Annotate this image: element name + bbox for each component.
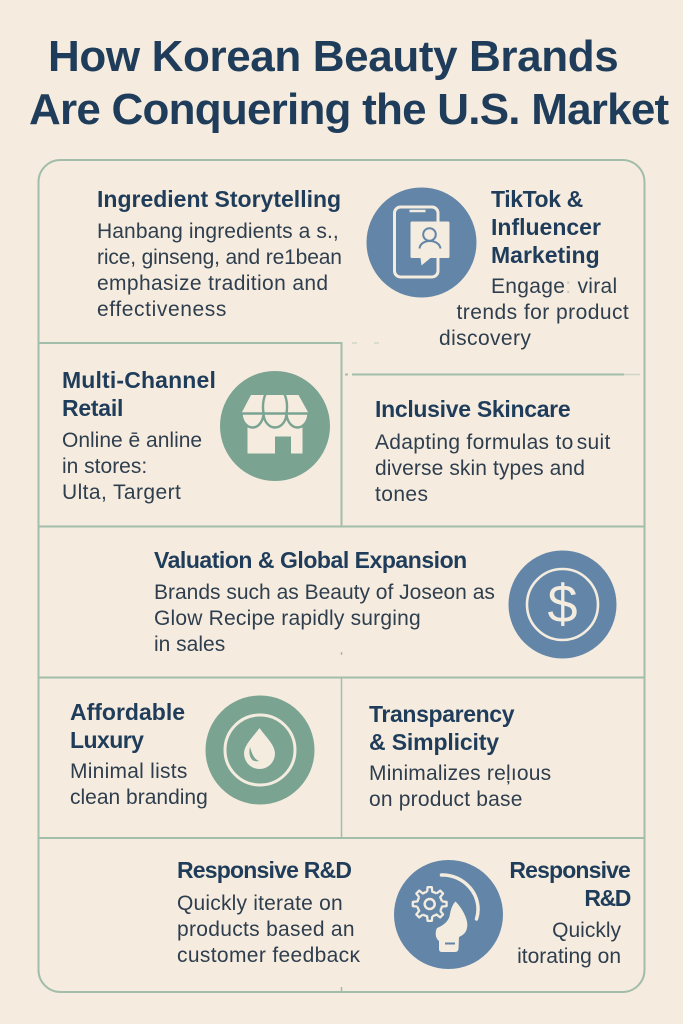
- icon: water drop: [206, 696, 314, 804]
- text block: in stores:: [62, 455, 147, 478]
- text block: tones: [375, 483, 428, 506]
- heading: Responsive: [509, 857, 630, 883]
- text block: products based an: [177, 918, 355, 941]
- heading: Influencer: [491, 214, 601, 240]
- text block: diverse skin types and: [375, 457, 585, 480]
- text block: [177, 892, 360, 967]
- title: How Korean Beauty Brands: [48, 32, 618, 81]
- text block: customer feedbacĸ: [177, 944, 360, 967]
- title: Are Conquering the U.S. Market: [29, 85, 668, 134]
- panel: valuation and global expansion: [154, 547, 495, 656]
- icon: phone with influencer: [366, 188, 476, 298]
- heading: R&D: [584, 885, 630, 911]
- heading: Ingredient Storytelling: [97, 186, 341, 212]
- text block: Minimal lists: [70, 760, 188, 783]
- heading: Transparency: [369, 701, 514, 727]
- panel: transparency and simplicity: [369, 701, 551, 811]
- text block: [154, 581, 495, 656]
- panel: responsive r&d right: [509, 857, 630, 968]
- text block: [369, 762, 551, 811]
- heading: TikTok &: [491, 186, 583, 212]
- title: [29, 32, 669, 134]
- text block: trends for product: [456, 300, 629, 324]
- heading: Retail: [62, 395, 123, 421]
- text block: Minimalizes reļıous: [369, 762, 551, 785]
- text block: Quickly: [552, 919, 621, 942]
- text block: Engage: viral: [491, 274, 617, 298]
- heading: & Simplicity: [369, 729, 499, 755]
- heading: Luxury: [70, 727, 143, 753]
- text block: rice, ginseng, and re1bean: [97, 246, 342, 269]
- icon: storefront: [220, 371, 330, 481]
- text block: itorating on: [517, 945, 621, 968]
- panel: tiktok and influencer marketing: [439, 186, 629, 350]
- text block: in sales: [154, 633, 225, 656]
- text block: [97, 220, 342, 321]
- heading: Affordable: [70, 699, 185, 725]
- text block: on product base: [369, 788, 523, 811]
- icon: head with gear: [394, 860, 503, 969]
- heading: Responsive R&D: [177, 857, 351, 883]
- heading: Marketing: [491, 242, 600, 268]
- text block: Adapting formulas to suit: [375, 431, 611, 454]
- text block: Glow Recipe rapidly surging: [154, 607, 421, 630]
- heading: [62, 367, 216, 421]
- text block: Quickly iterate on: [177, 892, 343, 915]
- heading: [70, 699, 185, 753]
- heading: Multi-Channel: [62, 367, 216, 393]
- icon: dollar coin: $: [547, 574, 578, 634]
- heading: [509, 857, 630, 911]
- text block: emphasize tradition and: [97, 272, 328, 295]
- text block: Brands such as Beauty of Joseon as: [154, 581, 495, 604]
- text block: [517, 919, 621, 968]
- heading: Inclusive Skincare: [375, 396, 570, 422]
- heading: Valuation & Global Expansion: [154, 547, 467, 573]
- panel: ingredient storytelling: [97, 186, 342, 321]
- text block: Ulta, Targert: [62, 481, 181, 504]
- text block: clean branding: [70, 786, 208, 809]
- panel: affordable luxury: [70, 699, 208, 809]
- heading: [491, 186, 601, 268]
- panel: multi-channel retail: [62, 367, 216, 504]
- panel: responsive r&d left: [177, 857, 360, 967]
- text block: Hanbang ingredients a s.,: [97, 220, 339, 243]
- text block: effectiveness: [97, 298, 227, 321]
- text block: Online ē anline: [62, 429, 202, 452]
- text block: [70, 760, 208, 809]
- text block: [375, 431, 611, 506]
- text block: discovery: [439, 326, 531, 350]
- panel: inclusive skincare: [375, 396, 611, 506]
- text block: [439, 274, 629, 350]
- icon: dollar coin: [508, 550, 616, 658]
- text block: [62, 429, 202, 504]
- heading: [369, 701, 514, 755]
